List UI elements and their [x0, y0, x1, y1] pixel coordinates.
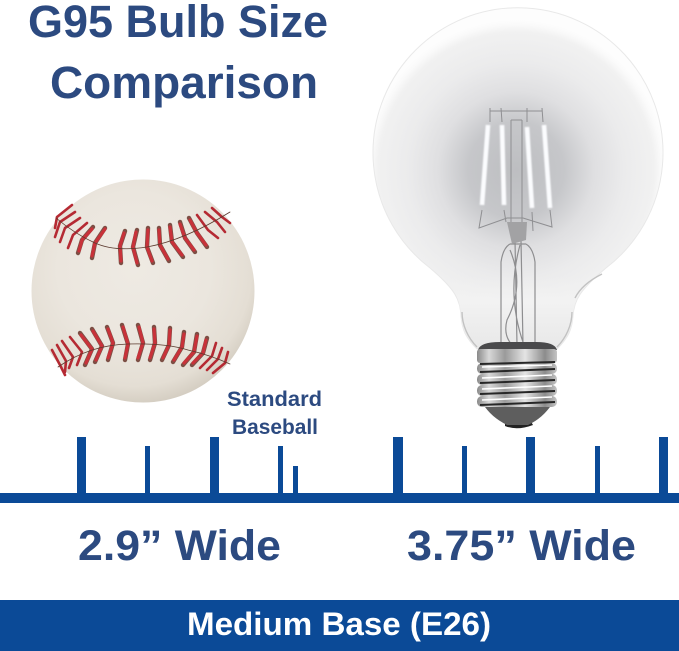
baseball label: [227, 388, 322, 439]
footer band: [0, 600, 679, 651]
metal screw base: [477, 342, 557, 428]
photo: light bulb: [373, 8, 663, 428]
title: [28, 0, 328, 108]
photo: baseball: [32, 180, 254, 402]
neck shading: [462, 274, 602, 347]
ruler: [0, 437, 679, 503]
bulb width label: 3.75” Wide: [407, 522, 636, 570]
glass stem: [501, 240, 535, 345]
baseball label: Standard: [227, 388, 322, 411]
bottom seam stitches: [80, 325, 207, 365]
baseball label: Baseball: [232, 416, 318, 439]
filaments: [482, 125, 550, 208]
bulb neck: [440, 276, 596, 349]
bulb glass: [373, 8, 663, 349]
footer text: Medium Base (E26): [187, 606, 491, 642]
title: Comparison: [50, 57, 318, 108]
filament support wires: [479, 108, 552, 231]
baseball width label: 2.9” Wide: [78, 522, 281, 570]
ball body: [32, 180, 254, 402]
top seam stitches: [52, 205, 230, 375]
